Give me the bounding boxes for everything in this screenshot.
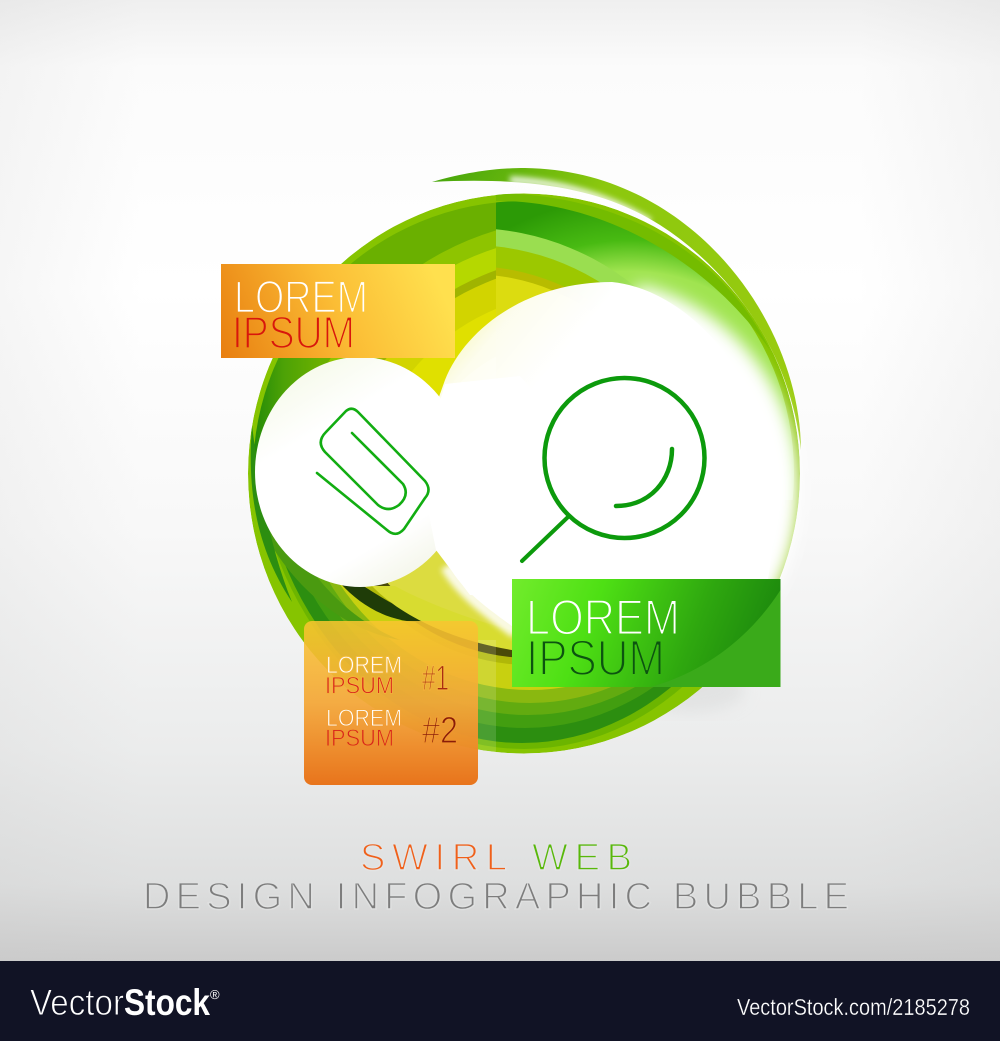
footer logo: Vector	[30, 982, 124, 1023]
label: orange top	[221, 264, 455, 358]
label text: ipsum: IPSUM	[526, 630, 665, 686]
title: swirl web: SWIRL	[360, 837, 507, 879]
soft shadow under circle	[635, 668, 745, 712]
footer url: VectorStock.com/2185278	[737, 994, 970, 1020]
left segment arcs	[254, 202, 496, 456]
footer logo	[30, 982, 220, 1023]
label text: ipsum: IPSUM	[232, 307, 355, 358]
list item 1: #1	[422, 659, 449, 698]
footer logo: Stock	[124, 982, 210, 1023]
list item 2: LOREM	[326, 705, 402, 732]
ring highlight top	[496, 193, 770, 350]
top swoosh	[432, 168, 801, 450]
list item 1: IPSUM	[325, 672, 394, 700]
left dark ring band	[251, 425, 292, 602]
label text: lorem: LOREM	[526, 590, 680, 646]
footer logo: ®	[210, 987, 220, 1002]
big white bubble	[420, 282, 800, 632]
right segment arcs	[496, 201, 794, 500]
seam highlight	[478, 640, 496, 755]
lower soft edge	[447, 566, 516, 632]
left white bubble	[255, 357, 465, 587]
list item 1: LOREM	[326, 652, 402, 679]
panel: orange list card	[304, 621, 478, 785]
dark streak	[342, 585, 421, 622]
list item 2: IPSUM	[325, 725, 394, 752]
swirl circle	[248, 194, 800, 754]
label: green right	[512, 579, 780, 687]
icon: magnifying glass	[522, 378, 704, 561]
list item 1	[325, 652, 449, 700]
subtitle: DESIGN INFOGRAPHIC BUBBLE	[143, 876, 849, 918]
title: swirl web	[360, 837, 632, 879]
left band	[270, 530, 398, 640]
list item 2	[325, 705, 458, 752]
list item 2: #2	[422, 710, 458, 752]
label text: lorem: LOREM	[234, 272, 368, 322]
olive band	[372, 586, 512, 650]
title: swirl web: WEB	[532, 837, 632, 879]
outer ring	[248, 194, 800, 754]
footer bar	[0, 961, 1000, 1041]
fill between bubbles	[420, 376, 560, 600]
icon: paperclip	[317, 409, 428, 534]
bottom concentric arcs	[270, 530, 682, 749]
